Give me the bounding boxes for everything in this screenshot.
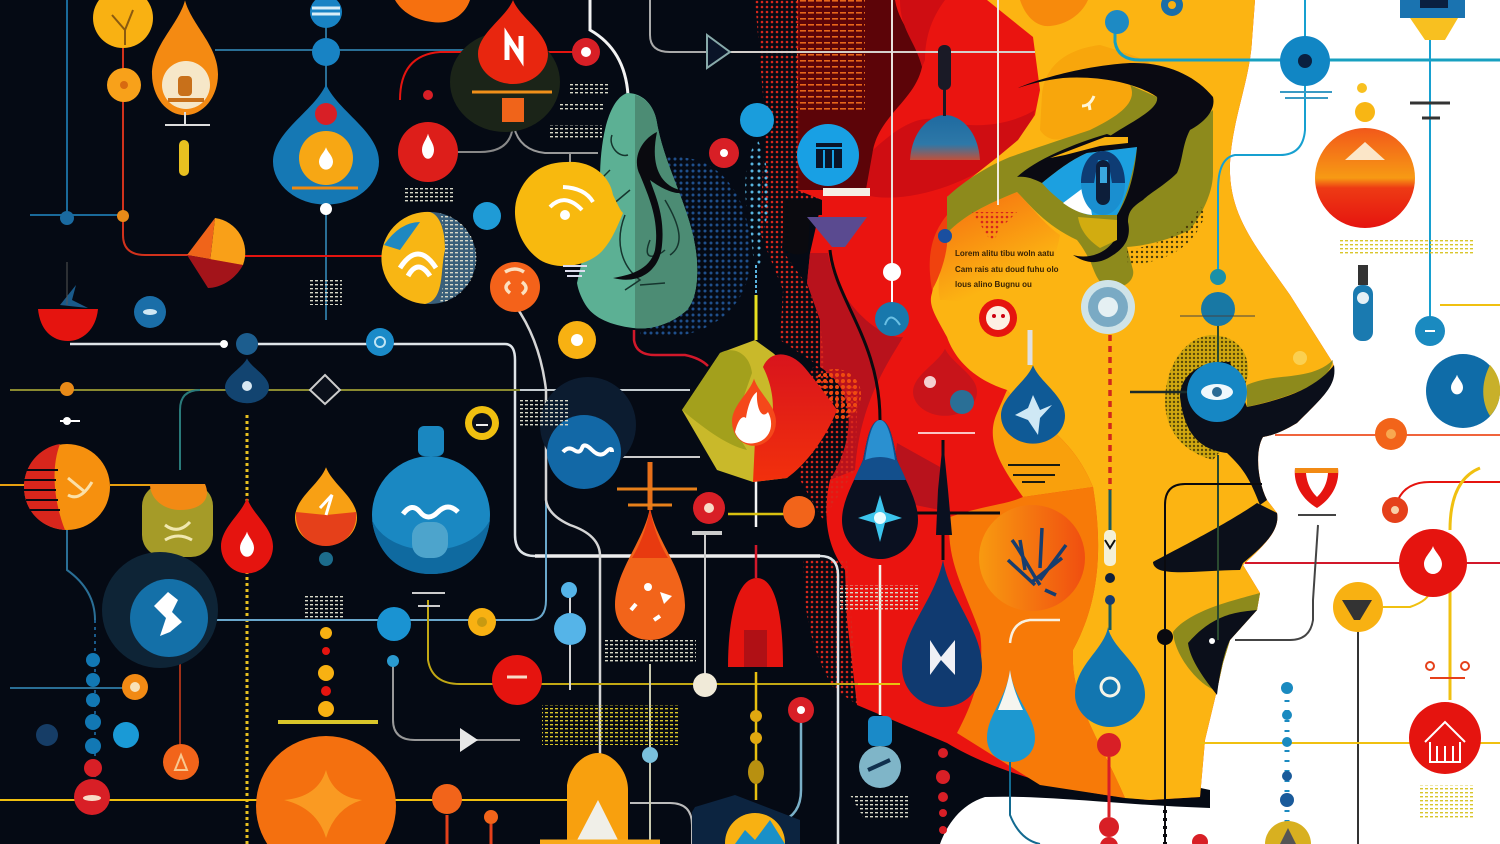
node: red button xyxy=(572,38,600,66)
node: blue circle dash xyxy=(1415,316,1445,346)
ear ring with eye xyxy=(1187,362,1247,422)
node: white bead xyxy=(693,673,717,697)
node: yellow ring with funnel xyxy=(1333,582,1383,632)
drop: light blue xyxy=(987,620,1060,762)
cluster: face drops xyxy=(840,0,1307,844)
drop: blue star xyxy=(1001,330,1065,482)
chin olive xyxy=(1173,593,1260,690)
node: triangle marker xyxy=(707,35,730,68)
node: red oval xyxy=(74,779,110,815)
panel: face xyxy=(755,0,1334,800)
node: cream pill xyxy=(1104,530,1116,605)
face amber patch xyxy=(993,390,1093,497)
node: small blue pair xyxy=(36,722,139,748)
chin highlight xyxy=(1209,638,1215,644)
node: yellow top circle xyxy=(93,0,153,48)
node: blue small teal xyxy=(60,211,74,225)
node: white dot xyxy=(883,263,901,281)
node: orange ring small xyxy=(1375,418,1407,450)
white bar xyxy=(823,188,870,196)
node: yellow triangle at bottom xyxy=(692,795,800,844)
eye socket olive xyxy=(947,85,1213,288)
node: small red beads xyxy=(1426,662,1469,678)
node: small blue at top xyxy=(1105,0,1183,34)
node: orange drop xyxy=(152,0,218,176)
dotted orange disc xyxy=(809,369,861,421)
eye xyxy=(1042,147,1137,215)
node: orange small drop xyxy=(163,744,199,780)
node: orange ring xyxy=(490,262,540,312)
node: red small xyxy=(709,138,739,168)
nose shadow and ear black xyxy=(1180,362,1334,505)
node: top-centre blue small xyxy=(310,0,342,28)
node: blue figure circle xyxy=(102,552,218,668)
node: small blue bead xyxy=(642,747,658,763)
node: red circle with white drop xyxy=(398,90,458,182)
mark above the eye xyxy=(1082,96,1094,110)
dotted ear halo xyxy=(1165,335,1248,460)
node: blue dots column xyxy=(84,653,102,777)
icon: orange coral disc xyxy=(979,505,1085,611)
cluster: lower left nodes xyxy=(24,210,815,844)
node: red column beads xyxy=(936,733,1121,844)
dotted blue blob xyxy=(640,157,750,337)
node: small yellow icon xyxy=(1293,351,1307,365)
face red base xyxy=(797,0,1334,800)
lips black xyxy=(1153,503,1277,572)
node: black dot xyxy=(1157,629,1173,645)
node: red drop xyxy=(221,498,273,573)
node: black hook xyxy=(783,200,822,254)
face cheek lobe xyxy=(939,192,1060,305)
text on cheek: Cam rais atu doud fuhu olo xyxy=(955,265,1059,274)
drop: navy tall xyxy=(902,440,982,707)
node: orange small lower xyxy=(432,784,498,844)
red stacked marker xyxy=(972,212,1017,240)
face maroon top xyxy=(797,0,922,190)
node: blue small disc xyxy=(134,296,166,328)
node: orange small with ring xyxy=(122,674,148,700)
node: small blue ring xyxy=(366,328,394,356)
node: orange bullet with cone xyxy=(540,753,660,844)
node: olive rounded square xyxy=(142,484,213,557)
node: small blue drop xyxy=(225,333,269,403)
node: blue pin disc xyxy=(1426,354,1500,428)
node: blue wave circle xyxy=(547,415,621,489)
node: red pin disc xyxy=(1399,529,1467,597)
stripes xyxy=(520,400,570,428)
node: bottom red beads xyxy=(1192,834,1208,844)
node: red shield xyxy=(1295,468,1338,515)
node: red dot xyxy=(788,697,814,723)
node: orange-red sun disc xyxy=(1315,83,1415,228)
face amber above eye xyxy=(1040,45,1156,139)
black brow xyxy=(1018,63,1213,262)
face dark red ribbon xyxy=(865,0,1035,198)
node: red pill circle xyxy=(492,655,542,705)
stripes left xyxy=(305,596,345,620)
node: orange small ring xyxy=(1382,497,1408,523)
dotted cheek patch xyxy=(1127,205,1205,265)
node: yellow beads xyxy=(748,710,764,784)
dotted column xyxy=(745,138,770,265)
node: blue hex on face xyxy=(1180,269,1255,326)
face orange patch xyxy=(949,487,1125,798)
node: half disc orange xyxy=(187,218,245,288)
top stripes xyxy=(797,0,865,110)
lid strip xyxy=(1050,137,1128,158)
node: big orange star xyxy=(256,722,396,844)
vertical coloured dots xyxy=(318,627,334,717)
text blocks small xyxy=(310,84,610,305)
node: blue disc top right xyxy=(1280,36,1332,98)
olive nose strip xyxy=(1247,360,1333,407)
node: blue dot and swirl xyxy=(875,302,909,336)
node: big blue drop xyxy=(273,38,379,215)
node: yellow wifi xyxy=(515,162,623,276)
text on cheek xyxy=(955,249,1059,289)
icon: speckled coral disc xyxy=(1081,280,1135,334)
node: red button centre xyxy=(692,492,815,533)
node: dark blob xyxy=(540,377,636,473)
text on cheek: lous alino Bugnu ou xyxy=(955,280,1032,289)
node: line dots xyxy=(60,340,228,425)
node: top red drop xyxy=(450,0,560,132)
node: blue circle top xyxy=(740,103,774,137)
face dotted left edge xyxy=(755,0,858,705)
node: orange drop centre xyxy=(615,462,697,640)
node: small funnel xyxy=(807,217,867,247)
node: diamond xyxy=(310,375,340,404)
drop: blue ring xyxy=(1075,627,1145,727)
node: triangle arrow xyxy=(460,728,478,752)
face top orange patch xyxy=(1020,0,1088,26)
node: blue dot column xyxy=(1280,682,1294,807)
node: red bell xyxy=(728,578,783,667)
node: blue connectors xyxy=(377,582,586,667)
cluster: right-side nodes xyxy=(1192,0,1500,844)
node: small blue dot xyxy=(938,229,952,243)
node: bottom yellow bulb xyxy=(1265,821,1311,844)
node: orange small xyxy=(117,210,129,222)
node: patterned disc xyxy=(381,212,476,304)
drop: red bubble xyxy=(913,349,977,433)
node: red half bowl xyxy=(38,262,98,341)
stripes centre xyxy=(603,640,696,664)
node: orange/red drop xyxy=(295,467,357,546)
node: sky-blue ball under face xyxy=(850,716,910,820)
node: small blue xyxy=(473,202,501,230)
node: teal leaf xyxy=(577,93,697,328)
node: teal small drop xyxy=(319,552,333,566)
stripes on red xyxy=(840,585,920,612)
node: top orange blob xyxy=(395,0,470,23)
node: orange circle xyxy=(107,68,141,102)
node: olive hexagon with flame xyxy=(682,340,837,482)
cluster: centre nodes xyxy=(187,0,980,482)
red small lobe xyxy=(930,215,947,290)
node: yellow target xyxy=(558,321,596,359)
text band xyxy=(1340,240,1475,256)
lower eyelid xyxy=(1017,134,1140,183)
yellow patch under eye xyxy=(1078,217,1117,248)
face yellow region xyxy=(931,0,1334,800)
cluster: left top nodes xyxy=(93,0,610,305)
node: top-right lamp xyxy=(1400,0,1465,40)
icon: red flower xyxy=(979,299,1017,337)
node: blue button with grid icon xyxy=(797,124,859,186)
node: dome xyxy=(910,45,980,160)
stripes yellow xyxy=(542,705,680,745)
node: dark bar xyxy=(1410,103,1450,118)
yellow lines band xyxy=(1420,785,1475,820)
chin black xyxy=(1188,610,1257,695)
node: large blue globe xyxy=(372,426,490,606)
node: pill device xyxy=(1353,265,1373,341)
node: striped orange disc xyxy=(24,444,110,530)
node: red house disc xyxy=(1409,702,1481,774)
drop: black star xyxy=(842,420,918,559)
text on cheek: Lorem alitu tibu woln aatu xyxy=(955,249,1054,258)
node: small ring yellow xyxy=(465,406,499,440)
face dark red band xyxy=(807,253,940,510)
